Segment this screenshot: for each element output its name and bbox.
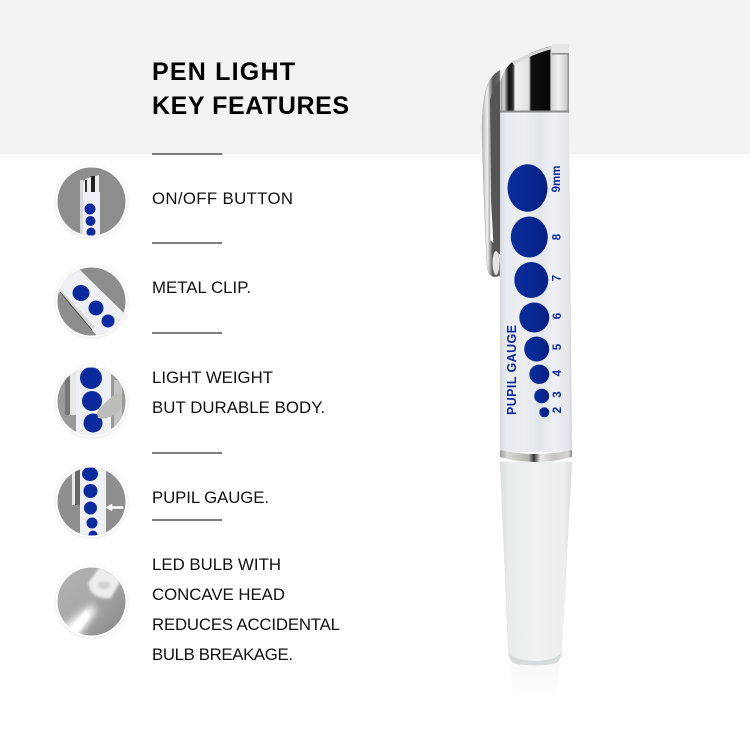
pupil gauge size labels: 8 xyxy=(552,233,564,240)
icon: metal clip thumbnail xyxy=(54,265,128,339)
label: on/off button: ON/OFF BUTTON xyxy=(152,189,293,208)
feature: led bulb xyxy=(55,555,340,664)
title: PEN LIGHT xyxy=(152,58,295,86)
pupil gauge size labels: 3 xyxy=(552,391,564,398)
pen metal clip xyxy=(482,70,500,277)
header band xyxy=(0,0,750,154)
label: pupil gauge: PUPIL GAUGE. xyxy=(152,488,269,507)
label: led bulb: CONCAVE HEAD xyxy=(152,585,285,604)
label: light weight body xyxy=(152,368,325,417)
icon: on/off button thumbnail xyxy=(55,165,128,240)
label: light weight body: BUT DURABLE BODY. xyxy=(152,398,325,417)
pupil gauge size labels xyxy=(551,166,564,413)
icon: LED bulb thumbnail xyxy=(55,565,128,640)
label: light weight body: LIGHT WEIGHT xyxy=(152,368,273,387)
pen chrome ring xyxy=(500,450,572,462)
pen upper body xyxy=(500,112,572,452)
icon: durable body thumbnail xyxy=(55,365,128,440)
title xyxy=(152,58,349,120)
label: metal clip: METAL CLIP. xyxy=(152,278,251,297)
pen lower barrel xyxy=(500,462,572,666)
pen reflection xyxy=(510,664,560,700)
icon: pupil gauge thumbnail xyxy=(55,465,128,540)
feature: pupil gauge xyxy=(55,465,269,540)
feature: light weight body xyxy=(55,365,325,440)
icon: white arrow xyxy=(106,504,123,511)
pupil gauge size labels: 5 xyxy=(552,343,564,350)
feature: on/off button xyxy=(55,165,293,240)
pupil gauge size labels: 7 xyxy=(552,275,564,281)
label: led bulb xyxy=(152,555,340,664)
label: led bulb: LED BULB WITH xyxy=(152,555,281,574)
pupil gauge size labels: 4 xyxy=(552,369,564,376)
pen light xyxy=(482,44,572,700)
pupil gauge size labels: 9mm xyxy=(551,166,563,192)
pupil gauge dots xyxy=(508,164,549,417)
label: led bulb: REDUCES ACCIDENTAL xyxy=(152,615,340,634)
title: KEY FEATURES xyxy=(152,92,349,120)
pen chrome cap xyxy=(500,44,569,112)
pupil gauge text: PUPIL GAUGE xyxy=(505,325,519,415)
pupil gauge size labels: 6 xyxy=(552,313,564,319)
pupil gauge size labels: 2 xyxy=(552,407,564,413)
feature: metal clip xyxy=(54,265,250,339)
label: led bulb: BULB BREAKAGE. xyxy=(152,645,293,664)
